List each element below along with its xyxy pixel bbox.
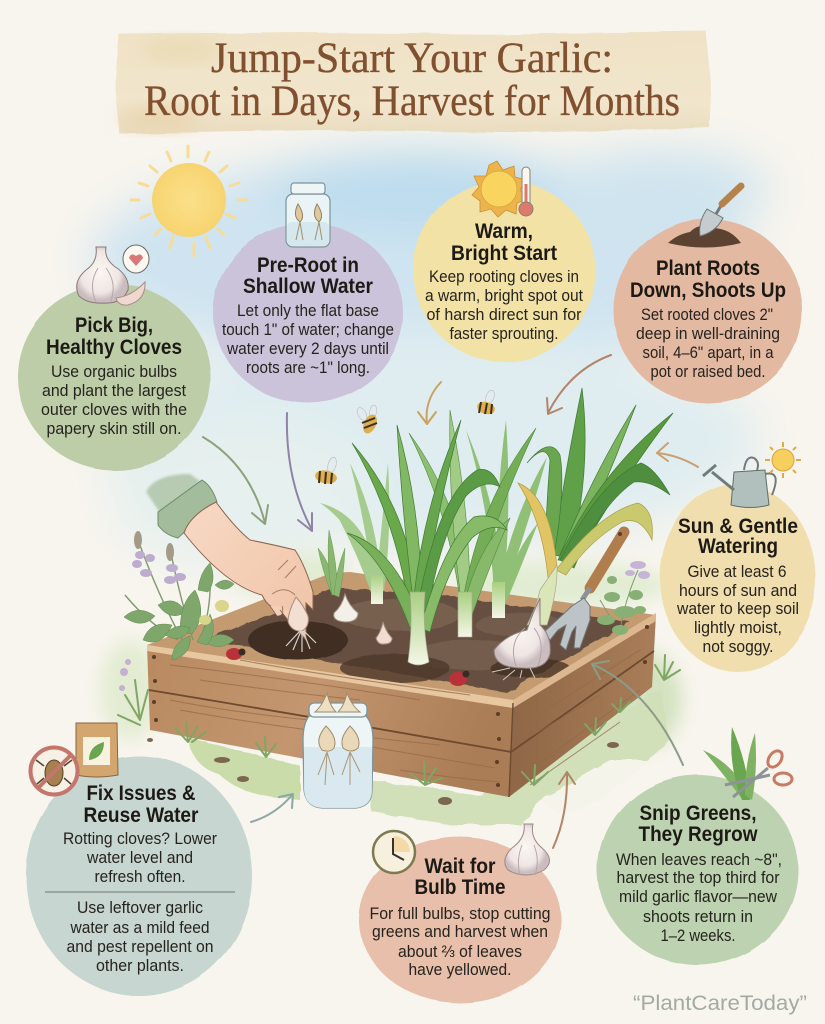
panel: plant roots down shoots up [614, 186, 802, 403]
body text: rotting: water level and [86, 849, 193, 867]
body text: Let only the flat base [237, 302, 379, 320]
heading: Down, Shoots Up [630, 278, 786, 302]
arrow: wait to bed [553, 772, 575, 848]
body text [425, 268, 583, 343]
body text: and plant the largest [42, 382, 186, 400]
heading: Sun & Gentle [678, 514, 798, 538]
icon: trowel in soil [668, 186, 741, 248]
body text: faster sprouting. [450, 325, 558, 343]
body text: shoots return in [643, 908, 753, 926]
body text: reuse: water as a mild feed [70, 919, 210, 937]
arm and hand [184, 502, 313, 640]
icon: large sun [131, 146, 247, 256]
body text: greens and harvest when [372, 923, 548, 941]
front plant [347, 420, 507, 665]
body text: water every 2 days until [226, 340, 389, 358]
panel: pick big healthy cloves [18, 245, 210, 470]
heading [451, 219, 557, 265]
body text: reuse: other plants. [96, 957, 184, 975]
body text: about ⅔ of leaves [398, 943, 522, 961]
icon: scissors and greens [703, 727, 792, 800]
body text: Set rooted cloves 2" [641, 306, 773, 324]
body text: For full bulbs, stop cutting [370, 905, 550, 923]
title text [144, 35, 680, 125]
raised garden bed [147, 572, 656, 797]
back right plant [466, 420, 547, 618]
ladybugs [226, 648, 470, 686]
body text [676, 563, 799, 656]
body text: reuse: and pest repellent on [66, 938, 214, 956]
heading: Wait for [424, 854, 496, 878]
grass tufts and pebbles [118, 655, 680, 805]
body text: reuse [66, 899, 214, 975]
heading [84, 781, 199, 827]
left herbs [124, 531, 234, 660]
heading: Fix Issues & [86, 781, 196, 805]
heading: Shallow Water [243, 274, 374, 298]
icon: feed bag [76, 723, 118, 777]
rim [147, 645, 513, 708]
ground wash [100, 553, 682, 825]
icon: jar with cloves [286, 183, 330, 247]
heading [630, 256, 786, 302]
sky wash [90, 150, 770, 570]
heading [678, 514, 798, 558]
heading: Bulb Time [414, 875, 506, 899]
heading: Watering [698, 534, 778, 558]
body text: papery skin still on. [46, 420, 182, 438]
back wall [147, 572, 656, 702]
body text: Use organic bulbs [51, 363, 177, 381]
arrows [203, 355, 698, 848]
arrow: snip to plants [592, 661, 683, 765]
body text: rotting [63, 830, 217, 886]
heading: Reuse Water [84, 803, 199, 827]
icon: watering can and sun [703, 442, 801, 508]
right herbs [597, 561, 650, 635]
body text: rotting: Rotting cloves? Lower [63, 830, 217, 848]
body text: outer cloves with the [41, 401, 187, 419]
arrow: fix to jar [251, 794, 293, 822]
front right face [509, 615, 656, 797]
back left plant [320, 463, 389, 604]
panel: snip greens [598, 727, 798, 965]
garlic plants [318, 388, 673, 665]
arrow: watering to plants [657, 443, 698, 467]
body text [616, 851, 782, 945]
heading [414, 854, 506, 899]
icon: sun and thermometer [472, 161, 533, 217]
body text: harvest the top third for [616, 869, 780, 887]
middle plant [409, 410, 536, 637]
arrow: pick to hand [203, 437, 268, 524]
body text [636, 306, 780, 381]
body text: water to keep soil [676, 600, 799, 618]
panel: pre-root in shallow water [213, 183, 403, 403]
title text: Root in Days, Harvest for Months [144, 78, 680, 125]
clove in hand [288, 597, 308, 631]
body text: soil, 4–6" apart, in a [642, 344, 774, 362]
body text: Keep rooting cloves in [429, 268, 579, 286]
body text: pot or raised bed. [650, 363, 766, 381]
soil [205, 588, 630, 692]
body text: lightly moist, [694, 619, 782, 637]
hand fork [544, 532, 624, 650]
body text: roots are ~1" long. [246, 359, 370, 377]
body text: touch 1" of water; change [222, 321, 394, 339]
heading: Healthy Cloves [46, 335, 182, 359]
heading: Plant Roots [656, 256, 760, 280]
front left face [147, 645, 513, 797]
heading: They Regrow [638, 822, 758, 846]
heading: Bright Start [451, 241, 557, 265]
panel: warm bright start [413, 161, 595, 362]
icon: no pests sign [30, 748, 78, 794]
body text [222, 302, 394, 377]
icon: garlic bulb [505, 824, 550, 875]
roots below held clove [286, 631, 316, 652]
panel: sun and gentle watering [660, 442, 816, 672]
heading: Pick Big, [75, 313, 153, 337]
body text: When leaves reach ~8", [616, 851, 782, 869]
body text: hours of sun and [679, 582, 797, 600]
arrow: warm to plants [418, 382, 441, 424]
cloves in soil [334, 594, 392, 644]
sleeve [146, 474, 217, 538]
jar of rooting cloves [303, 693, 373, 808]
body text: a warm, bright spot out [425, 287, 583, 305]
panel: fix issues and reuse water [26, 723, 252, 996]
icon: clock [373, 831, 415, 873]
title banner [115, 31, 711, 134]
body text: mild garlic flavor—new [619, 888, 777, 906]
bees [314, 389, 496, 485]
heading [638, 801, 758, 846]
heading: Pre-Root in [257, 253, 359, 277]
body text: have yellowed. [408, 961, 512, 979]
body text: reuse: Use leftover garlic [77, 899, 203, 917]
arrow: plant to bed [547, 355, 611, 414]
body text: Give at least 6 [688, 563, 786, 581]
body text: deep in well-draining [636, 325, 780, 343]
sprout [318, 530, 345, 597]
body text: of harsh direct sun for [426, 306, 582, 324]
arrow: pre-root to soil [287, 413, 312, 531]
body text [41, 363, 187, 438]
large garlic bulb and roots [492, 598, 550, 680]
body text: 1–2 weeks. [660, 927, 736, 945]
watermark: “PlantCareToday” [633, 992, 807, 1015]
body text [370, 905, 550, 979]
body text: rotting: refresh often. [94, 868, 186, 886]
heading [46, 313, 182, 359]
tall plant with pulled bulb [518, 388, 673, 625]
title text: Jump-Start Your Garlic: [211, 35, 613, 82]
body text: not soggy. [702, 638, 774, 656]
icon: garlic with heart [77, 245, 149, 305]
heading: Snip Greens, [640, 801, 756, 825]
heading [243, 253, 374, 298]
panel: wait for bulb time [359, 824, 561, 1003]
heading: Warm, [475, 219, 533, 243]
hand planting clove [146, 474, 313, 640]
